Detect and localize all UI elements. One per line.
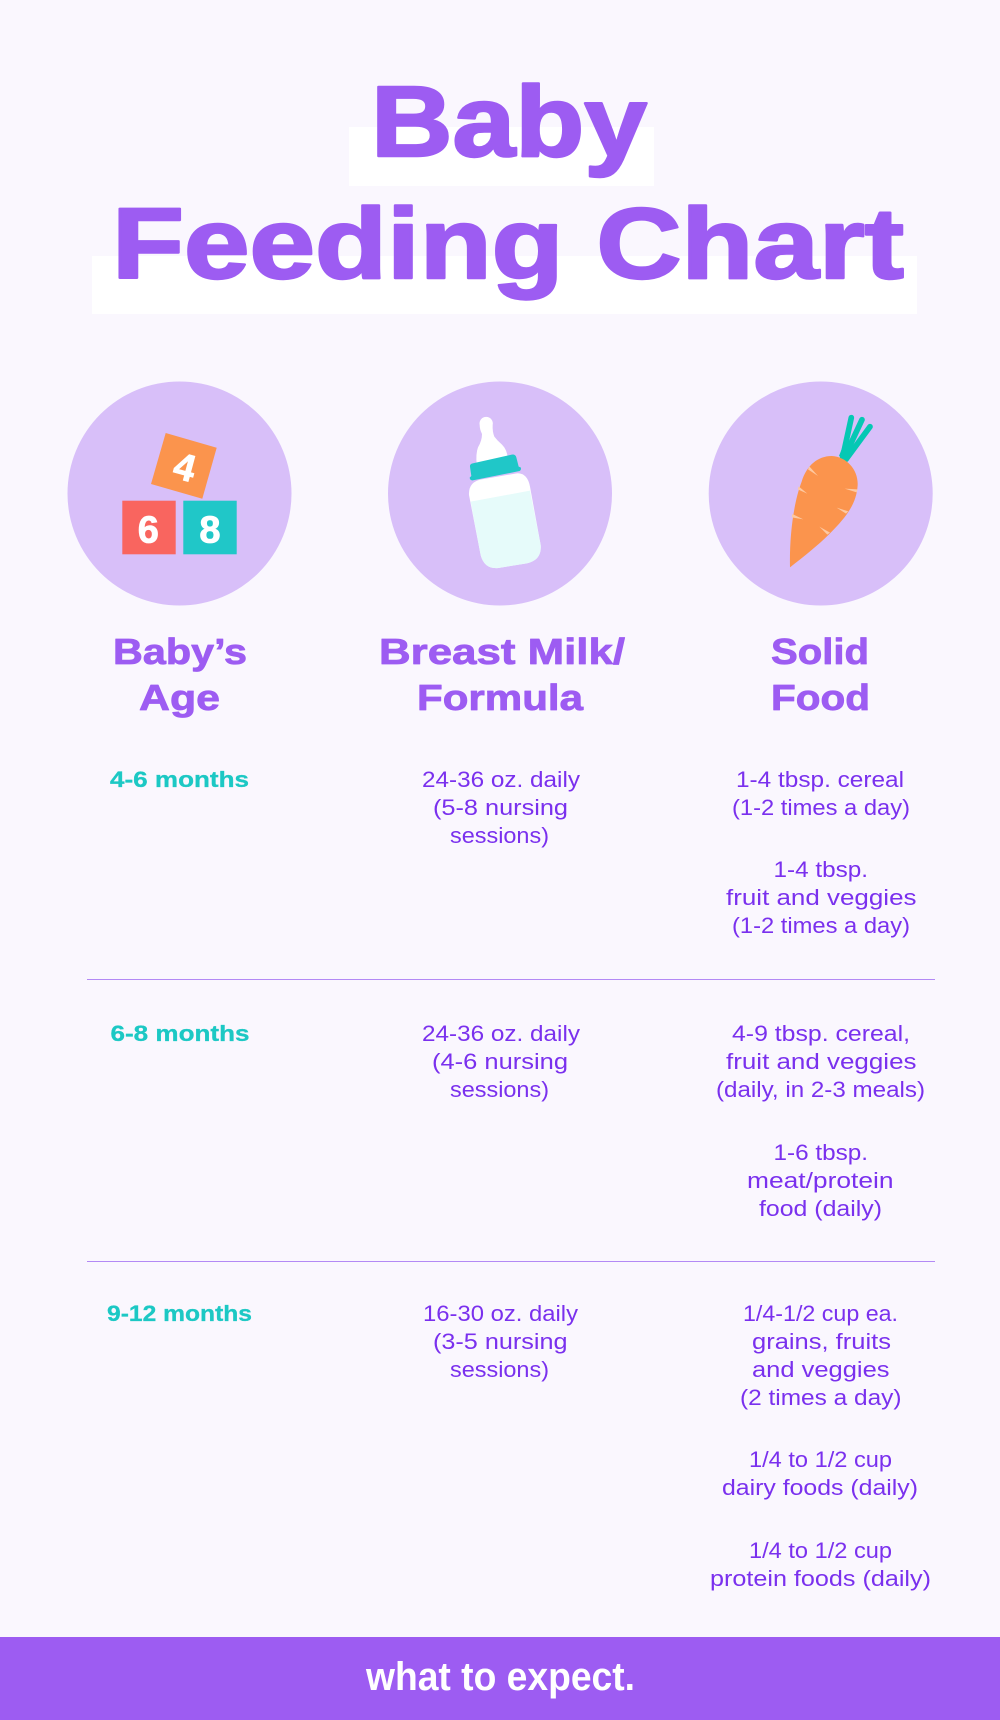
footer logo band: what to expect. [365, 1655, 635, 1699]
row 1 age: 4-6 months [110, 767, 249, 792]
heading: Baby's Age: Baby’s [113, 631, 247, 672]
icon: carrot [709, 382, 933, 606]
row 2 solid food: fruit and veggies [726, 1049, 916, 1074]
row 1 milk: sessions) [450, 823, 549, 848]
heading: Solid Food: Food [771, 677, 870, 718]
row 3 solid food: 1/4-1/2 cup ea. [743, 1301, 898, 1326]
row 3 milk: 16-30 oz. daily [423, 1301, 578, 1326]
heading: Baby's Age: Age [139, 677, 220, 718]
row 3 milk: sessions) [450, 1357, 549, 1382]
row 3 solid food: (2 times a day) [740, 1385, 902, 1410]
row 1 solid food: (1-2 times a day) [732, 795, 910, 820]
row 3 solid food: protein foods (daily) [710, 1566, 931, 1591]
row 2 solid food: meat/protein [747, 1168, 894, 1193]
row 2 milk [422, 1021, 580, 1102]
row 1 solid food: (1-2 times a day) [732, 913, 910, 938]
row 1 milk: 24-36 oz. daily [422, 767, 580, 792]
icon: age blocks: 8 [199, 510, 221, 552]
row 3 solid food: 1/4 to 1/2 cup [749, 1538, 892, 1563]
row 1 solid food: 1-4 tbsp. [774, 857, 868, 882]
title: Feeding Chart [112, 188, 904, 300]
title: Baby [371, 66, 647, 178]
icon: age blocks [68, 382, 292, 606]
row 1 solid food: 1-4 tbsp. cereal [736, 767, 904, 792]
heading: Solid Food [771, 631, 870, 718]
row 3 solid food: dairy foods (daily) [722, 1475, 918, 1500]
row 2 milk: (4-6 nursing [432, 1049, 568, 1074]
heading: Breast Milk/Formula: Formula [417, 677, 584, 718]
row 2 age: 6-8 months [110, 1021, 250, 1046]
heading: Baby's Age [113, 631, 247, 718]
row 3 solid food: 1/4 to 1/2 cup [749, 1447, 892, 1472]
icon: age blocks: 6 [138, 510, 159, 552]
row 1 milk: (5-8 nursing [433, 795, 568, 820]
icon: baby bottle [388, 382, 612, 606]
row 3 milk [423, 1301, 578, 1382]
heading: Breast Milk/Formula [379, 631, 625, 718]
row 3 age: 9-12 months [107, 1301, 252, 1326]
row 2 solid food: 4-9 tbsp. cereal, [732, 1021, 910, 1046]
row 1 solid food [726, 767, 916, 938]
footer logo band [0, 1637, 1000, 1720]
heading: Breast Milk/Formula: Breast Milk/ [379, 631, 625, 672]
row 3 solid food: grains, fruits [752, 1329, 891, 1354]
icon: age blocks: 4 [169, 445, 200, 491]
row 2 milk: sessions) [450, 1077, 549, 1102]
row 3 solid food: and veggies [752, 1357, 890, 1382]
row 2 milk: 24-36 oz. daily [422, 1021, 580, 1046]
heading: Solid Food: Solid [771, 631, 869, 672]
row 1 solid food: fruit and veggies [726, 885, 916, 910]
row 2 solid food [716, 1021, 925, 1221]
row 2 solid food: 1-6 tbsp. [774, 1140, 868, 1165]
row 3 solid food [710, 1301, 931, 1591]
row 2 solid food: (daily, in 2-3 meals) [716, 1077, 925, 1102]
row 3 milk: (3-5 nursing [433, 1329, 568, 1354]
row 2 solid food: food (daily) [759, 1196, 882, 1221]
row 1 milk [422, 767, 580, 848]
title [92, 66, 917, 314]
